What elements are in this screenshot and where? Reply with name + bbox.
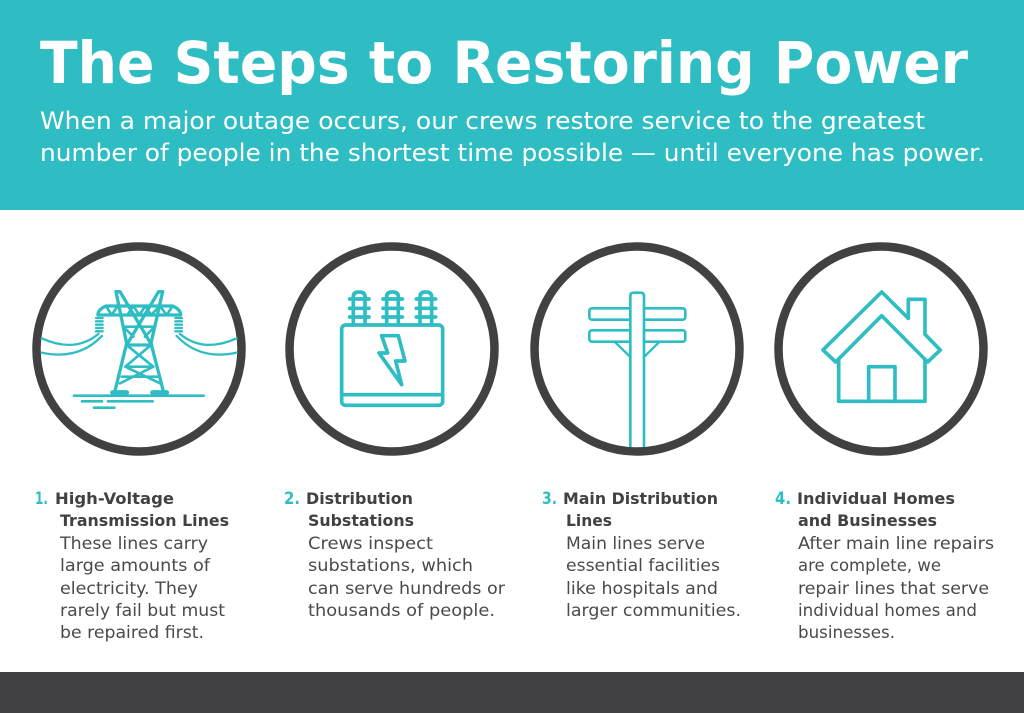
step 1 text: rarely fail but must <box>60 601 226 620</box>
step 3 text: 3. <box>542 489 557 509</box>
step 4 text: repair lines that serve <box>798 579 989 598</box>
step 1 text: These lines carry <box>59 534 208 553</box>
step 4 text: are complete, we <box>798 556 941 575</box>
step 3 text: essential facilities <box>566 556 720 575</box>
step 4 text: businesses. <box>798 623 895 642</box>
step 3 text <box>542 489 741 620</box>
step 4 text: 4. <box>775 489 791 509</box>
icon: substation transformer in circle <box>290 246 494 452</box>
step 3 text: Main Distribution <box>563 489 718 508</box>
icon: house in circle <box>778 246 984 452</box>
step 1 text: High-Voltage <box>55 489 174 508</box>
intro text: When a major outage occurs, our crews restore service to the greatest <box>40 107 925 135</box>
step 2 text <box>284 489 505 620</box>
intro text: number of people in the shortest time possible — until everyone has power. <box>40 139 985 167</box>
step 2 text: Distribution <box>306 489 413 508</box>
step 4 text: Individual Homes <box>797 489 955 508</box>
icon: transmission tower in circle <box>36 246 242 452</box>
step 1 text: be repaired first. <box>60 623 204 642</box>
step 4 text <box>775 489 994 642</box>
step 2 text: Crews inspect <box>308 534 434 553</box>
step 2 text: Substations <box>308 511 414 530</box>
step 3 text: Lines <box>566 511 612 530</box>
step 2 text: 2. <box>284 489 300 509</box>
footer bar <box>0 672 1024 713</box>
icon: utility pole in circle <box>534 246 740 452</box>
intro text <box>40 107 985 167</box>
title: The Steps to Restoring Power <box>40 29 968 97</box>
step 3 text: larger communities. <box>566 601 741 620</box>
panel: header banner <box>0 0 1024 210</box>
step 4 text: After main line repairs <box>798 534 994 553</box>
step 1 text: electricity. They <box>60 579 198 598</box>
step 2 text: can serve hundreds or <box>308 579 505 598</box>
step 2 text: thousands of people. <box>308 601 495 620</box>
step 4 text: and Businesses <box>798 511 937 530</box>
step 1 text <box>35 489 229 642</box>
step 4 text: individual homes and <box>798 601 977 620</box>
step 3 text: like hospitals and <box>566 579 718 598</box>
step 2 text: substations, which <box>308 556 473 575</box>
step 3 text: Main lines serve <box>566 534 705 553</box>
step 1 text: large amounts of <box>60 556 211 575</box>
step 1 text: 1. <box>35 489 48 509</box>
step 1 text: Transmission Lines <box>60 511 229 530</box>
